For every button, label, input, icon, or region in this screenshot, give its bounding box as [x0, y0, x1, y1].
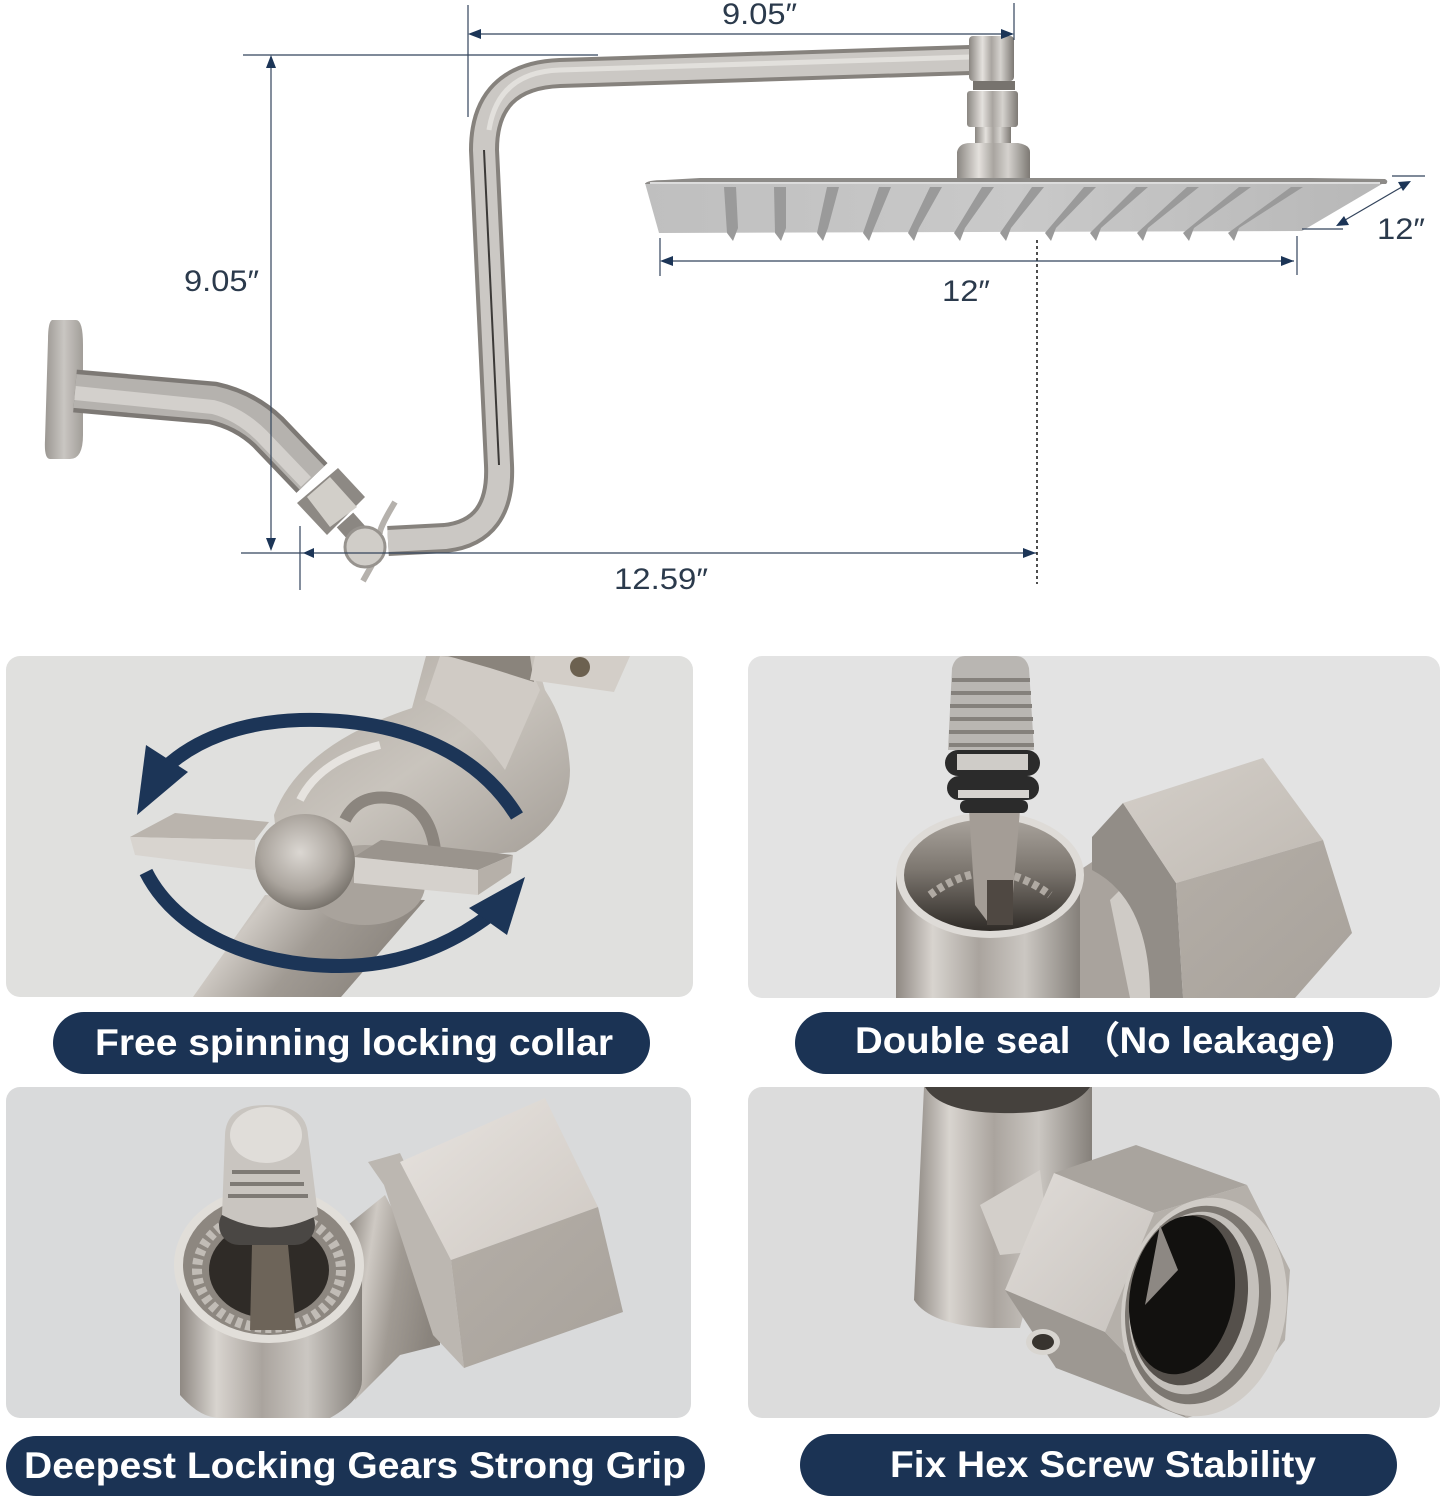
- product diagram: shower arm and head with dimensions: [45, 0, 1425, 596]
- dimension: vertical 9.05 inches: 9.05″: [184, 265, 259, 298]
- icon: wing lever: [130, 813, 513, 910]
- icon: gear cup body: [174, 1187, 364, 1418]
- icon: neck: [980, 1170, 1050, 1255]
- icon: ball joint connector: [957, 36, 1030, 178]
- label: double seal: [795, 1012, 1392, 1074]
- icon: wall flange: [45, 320, 83, 459]
- label: fix hex screw stability: [800, 1434, 1397, 1496]
- icon: neck: [348, 1195, 440, 1400]
- icon: lower tube: [193, 895, 425, 997]
- icon: collar metal body: [274, 656, 630, 925]
- arrow: lower rotation arrow: [146, 872, 525, 966]
- label: double seal: Double seal （No leakage): [855, 1020, 1335, 1061]
- icon: threaded pin: [219, 1105, 318, 1245]
- dimension: top 9.05 inches: [243, 0, 1014, 117]
- icon: rain shower head: [645, 178, 1387, 241]
- icon: lower curved arm: [75, 391, 312, 482]
- panel: free spinning locking collar photo: [6, 656, 693, 997]
- dimension: head depth 12 inches: 12″: [1377, 213, 1425, 246]
- arrow: upper rotation arrow: [137, 720, 517, 816]
- label: fix hex screw stability: Fix Hex Screw Stability: [890, 1444, 1316, 1485]
- label: deepest locking gears: Deepest Locking Gears Strong Grip: [24, 1445, 686, 1486]
- panel: deepest locking gears photo: [6, 1087, 691, 1418]
- icon: hex nut with threaded opening: [1005, 1145, 1304, 1430]
- dimension: vertical 9.05 inches: [184, 55, 1037, 553]
- icon: S-shaped riser arm: [388, 57, 970, 541]
- dimension: bottom 12.59 inches: 12.59″: [614, 563, 708, 596]
- label: deepest locking gears: [6, 1436, 705, 1496]
- label: free spinning locking collar: [53, 1012, 650, 1074]
- icon: neck and coupling cup: [896, 812, 1185, 998]
- icon: hex nut: [368, 1098, 623, 1368]
- dimension: bottom 12.59 inches: [300, 240, 1037, 596]
- dimension: head depth 12 inches: [1302, 176, 1425, 246]
- panel: fix hex screw photo: [748, 1087, 1440, 1430]
- icon: hex nut: [1092, 758, 1352, 998]
- dimension: head width 12 inches: [660, 236, 1297, 308]
- dimension: head width 12 inches: 12″: [942, 275, 990, 308]
- label: free spinning locking collar: Free spinning locking collar: [95, 1022, 613, 1063]
- icon: swivel joint: [297, 468, 395, 581]
- icon: upper cup: [914, 1087, 1092, 1328]
- panel: double seal photo: [748, 656, 1440, 998]
- icon: threaded pin with seals: [945, 656, 1040, 925]
